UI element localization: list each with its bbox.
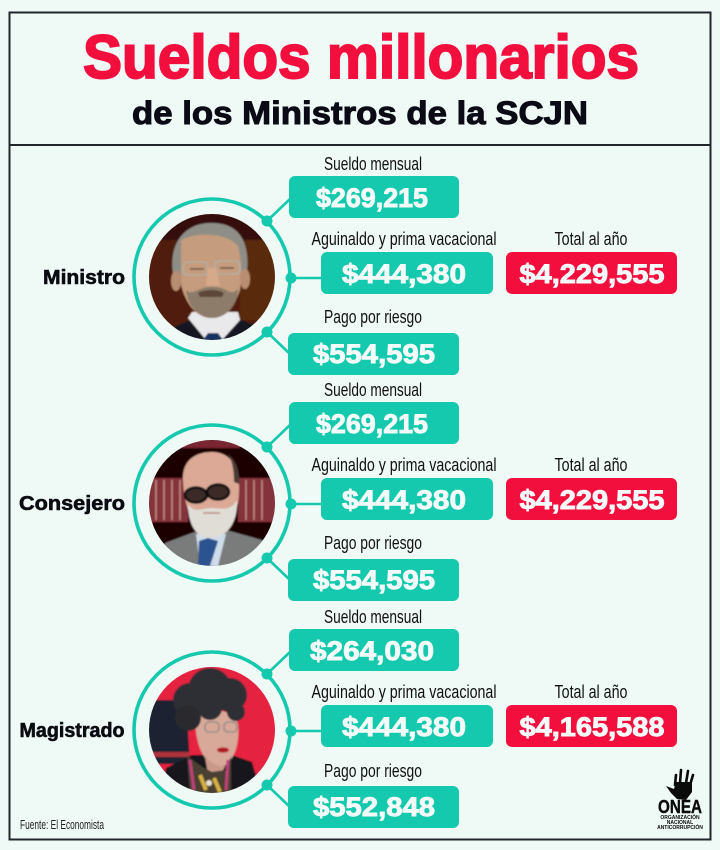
item: Sueldo mensual: $269,215 (316, 409, 428, 439)
item: Sueldo mensual: Sueldo mensual (324, 607, 422, 627)
item: Aguinaldo y prima vacacional: $444,380 (342, 485, 466, 515)
section: Consejero (19, 380, 677, 601)
item: Total al año (506, 229, 677, 294)
item: Sueldo mensual: Sueldo mensual (324, 154, 422, 174)
item: Pago por riesgo: $554,595 (313, 565, 435, 595)
logo tagline: ORGANIZACIÓN (660, 813, 700, 821)
item: Aguinaldo y prima vacacional (312, 229, 496, 294)
divider (9, 144, 711, 146)
portrait: Consejero (149, 440, 275, 566)
item: Aguinaldo y prima vacacional (312, 682, 496, 747)
title: Sueldos millonarios (83, 23, 639, 91)
ring with connector nodes (134, 652, 322, 808)
role label: Magistrado: Magistrado (20, 720, 124, 742)
subtitle: de los Ministros de la SCJN (132, 95, 588, 131)
item: Aguinaldo y prima vacacional: Aguinaldo y prima vacacional (312, 682, 496, 702)
logo name: ONEA (658, 797, 702, 817)
item: Pago por riesgo: Pago por riesgo (324, 533, 422, 553)
item: Pago por riesgo (288, 761, 459, 828)
item: Aguinaldo y prima vacacional: Aguinaldo y prima vacacional (312, 455, 496, 475)
item: Pago por riesgo (288, 533, 459, 601)
item: Pago por riesgo: $552,848 (313, 792, 435, 822)
portrait: Magistrado (149, 667, 275, 793)
logo tagline: ANTICORRUPCIÓN (657, 823, 703, 831)
ring with connector nodes (134, 425, 322, 581)
role label: Consejero: Consejero (19, 493, 125, 515)
item: Sueldo mensual (289, 154, 459, 218)
source note: Fuente: El Economista (20, 818, 104, 832)
item: Sueldo mensual: Sueldo mensual (324, 380, 422, 400)
item: Pago por riesgo: Pago por riesgo (324, 307, 422, 327)
item: Total al año (506, 682, 677, 747)
item: Sueldo mensual: $269,215 (316, 183, 428, 213)
logo: ONEA (657, 770, 703, 831)
logo tagline (657, 813, 703, 831)
item: Total al año: Total al año (554, 455, 628, 475)
item: Aguinaldo y prima vacacional: Aguinaldo y prima vacacional (312, 229, 496, 249)
item: Aguinaldo y prima vacacional (312, 455, 496, 520)
section: Ministro (43, 154, 677, 375)
icon: hand (666, 770, 693, 800)
item: Total al año: Total al año (554, 682, 628, 702)
item: Total al año: Total al año (554, 229, 628, 249)
item: Sueldo mensual: $264,030 (310, 636, 434, 666)
item: Aguinaldo y prima vacacional: $444,380 (342, 259, 466, 289)
item: Pago por riesgo: $554,595 (313, 339, 435, 369)
item: Aguinaldo y prima vacacional: $444,380 (342, 712, 466, 742)
section: Magistrado (20, 607, 677, 828)
logo tagline: NACIONAL (667, 820, 693, 826)
item: Total al año: $4,229,555 (520, 485, 664, 515)
item: Sueldo mensual (289, 607, 459, 671)
item: Pago por riesgo (288, 307, 459, 375)
portrait: Ministro (149, 214, 275, 340)
role label: Ministro: Ministro (43, 267, 125, 289)
ring with connector nodes (134, 199, 322, 355)
item: Total al año: $4,165,588 (520, 712, 664, 742)
item: Pago por riesgo: Pago por riesgo (324, 761, 422, 781)
item: Total al año (506, 455, 677, 520)
item: Sueldo mensual (289, 380, 459, 444)
item: Total al año: $4,229,555 (520, 259, 664, 289)
